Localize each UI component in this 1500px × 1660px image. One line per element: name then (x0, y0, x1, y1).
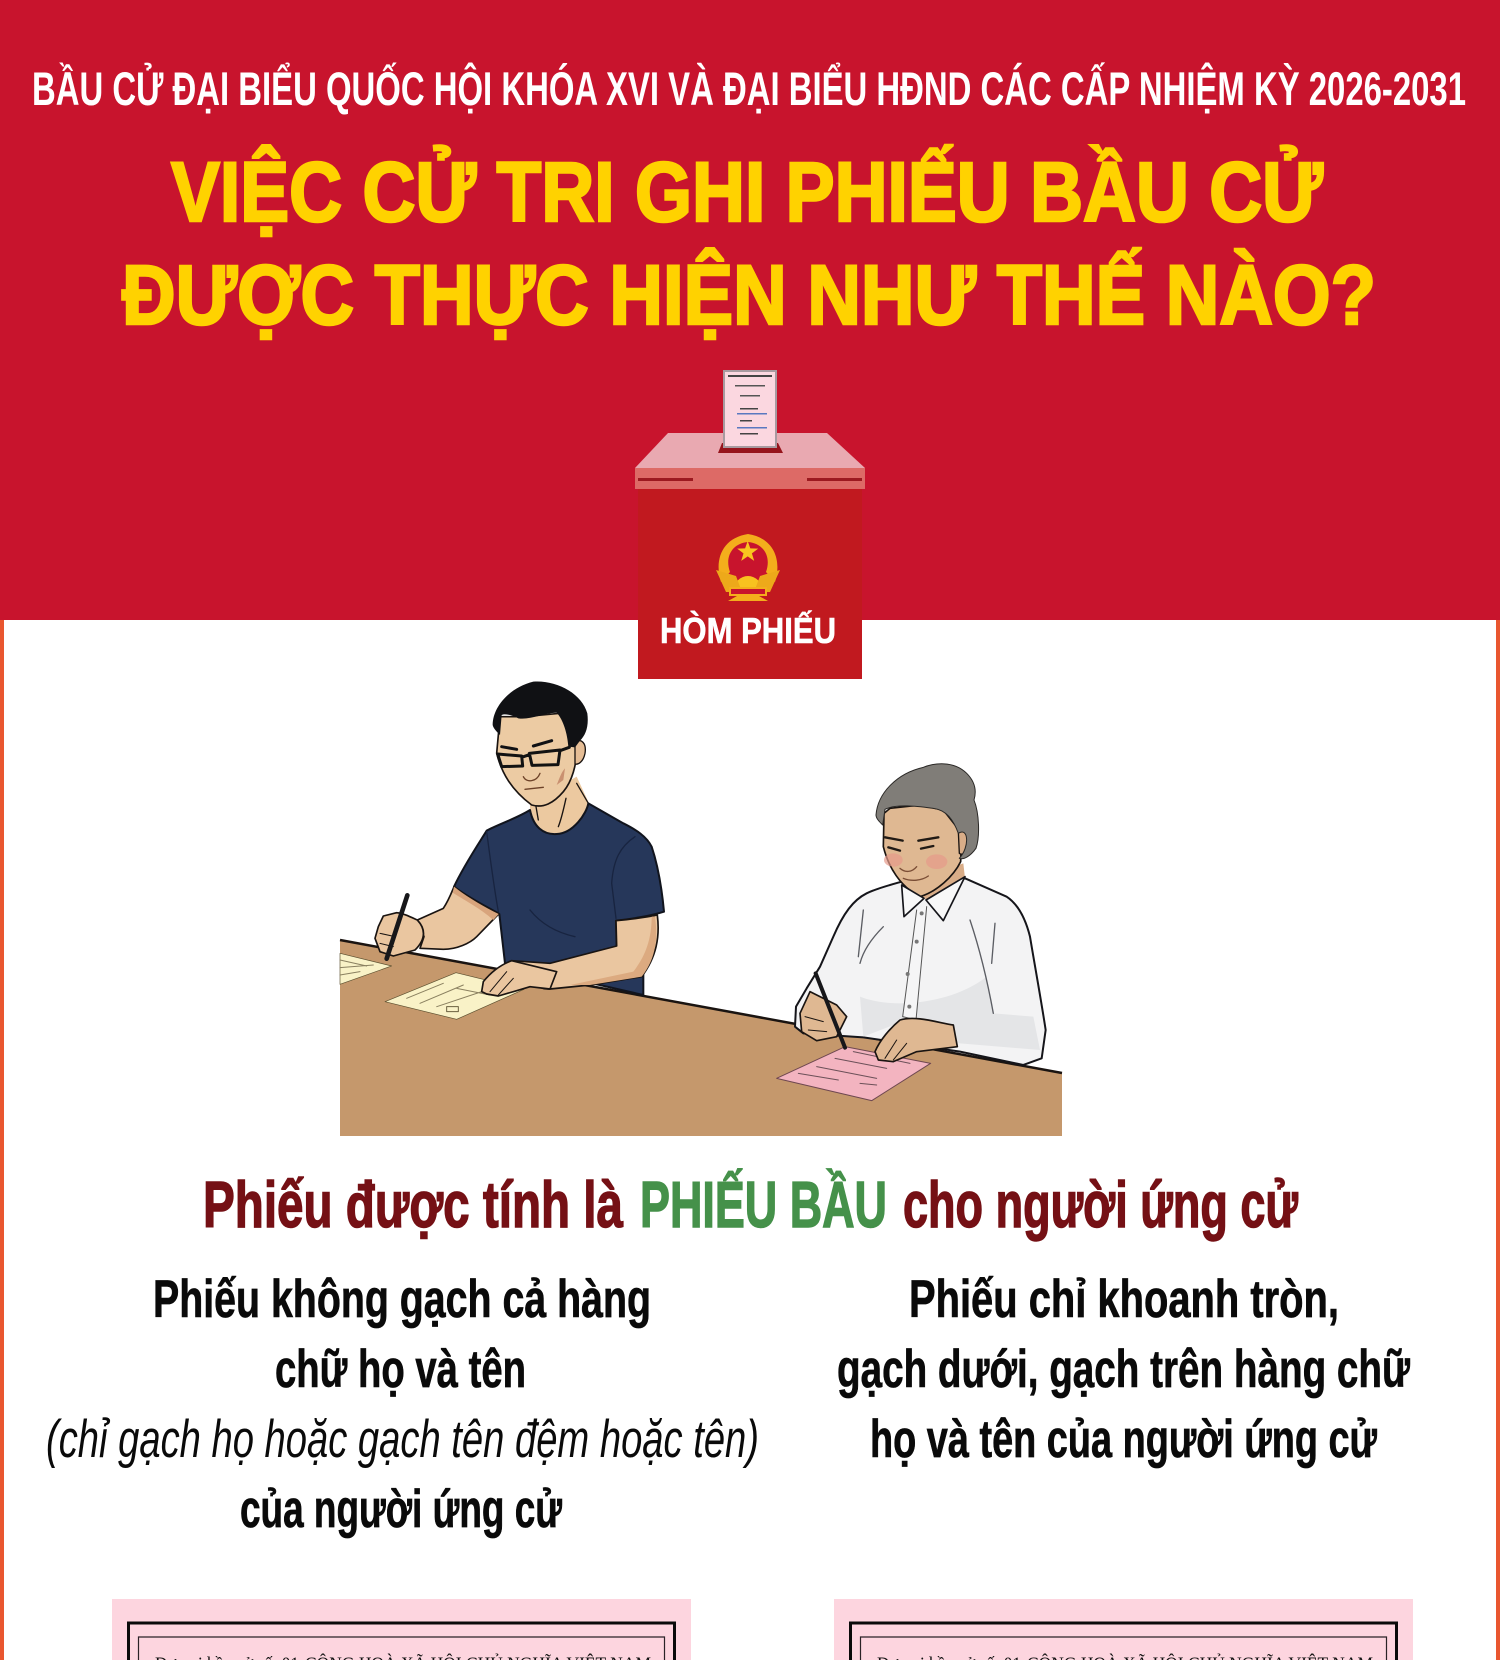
ballot paper in slot (724, 371, 776, 447)
figure: elderly woman (777, 764, 1046, 1101)
text block: left condition: của người ứng cử (240, 1480, 562, 1539)
paper left (340, 953, 392, 984)
left hand (375, 913, 423, 956)
pen (387, 895, 407, 959)
pen (816, 973, 845, 1048)
figure: young man (340, 682, 664, 1019)
text block: left condition: Phiếu không gạch cả hàng (153, 1270, 651, 1329)
text block: left condition: chữ họ và tên (275, 1340, 526, 1399)
table (340, 940, 1062, 1136)
national emblem (716, 534, 780, 601)
section heading: cho người ứng cử (903, 1168, 1299, 1241)
facial features (885, 837, 938, 851)
box lid (635, 433, 865, 468)
face (497, 713, 578, 806)
pink ballot (777, 1047, 931, 1101)
ballot sample: right (834, 1599, 1413, 1660)
main title: VIỆC CỬ TRI GHI PHIẾU BẦU CỬ (171, 145, 1323, 239)
illustration: voters writing at table (340, 682, 1062, 1136)
text block: right condition: Phiếu chỉ khoanh tròn, (909, 1270, 1339, 1329)
box label: HÒM PHIẾU (660, 609, 836, 651)
nose and mouth (523, 773, 543, 789)
paper right (385, 973, 524, 1019)
right arm (512, 915, 658, 989)
text block: right condition (837, 1270, 1410, 1469)
right hand (875, 1018, 957, 1062)
ear (958, 825, 971, 854)
section heading (203, 1168, 1299, 1241)
section heading: Phiếu được tính là (203, 1168, 624, 1241)
blouse (795, 878, 1046, 1065)
eyebrows (502, 741, 552, 749)
slot base (718, 443, 783, 453)
ballot sample: left (112, 1599, 691, 1660)
ear (575, 741, 585, 764)
t-shirt (454, 803, 664, 995)
panel: red header (0, 0, 1500, 620)
text block: left condition: (chỉ gạch họ hoặc gạch tên đệm hoặc tên) (46, 1410, 759, 1469)
neck (907, 863, 965, 900)
box body (638, 489, 862, 679)
left arm (417, 887, 499, 949)
text block: left condition (46, 1270, 759, 1539)
hair (493, 682, 588, 747)
section heading: PHIẾU BẦU (640, 1168, 887, 1241)
face (883, 805, 962, 897)
collar (902, 877, 965, 921)
left hand (800, 992, 847, 1041)
glasses (498, 747, 569, 767)
right hand (482, 961, 557, 996)
blouse shading (860, 977, 1040, 1050)
icon: ballot box (635, 371, 865, 679)
main title (122, 145, 1376, 342)
neck (530, 777, 589, 835)
button strip (903, 907, 927, 1020)
hair (876, 764, 979, 859)
main title: ĐƯỢC THỰC HIỆN NHƯ THẾ NÀO? (122, 248, 1376, 342)
